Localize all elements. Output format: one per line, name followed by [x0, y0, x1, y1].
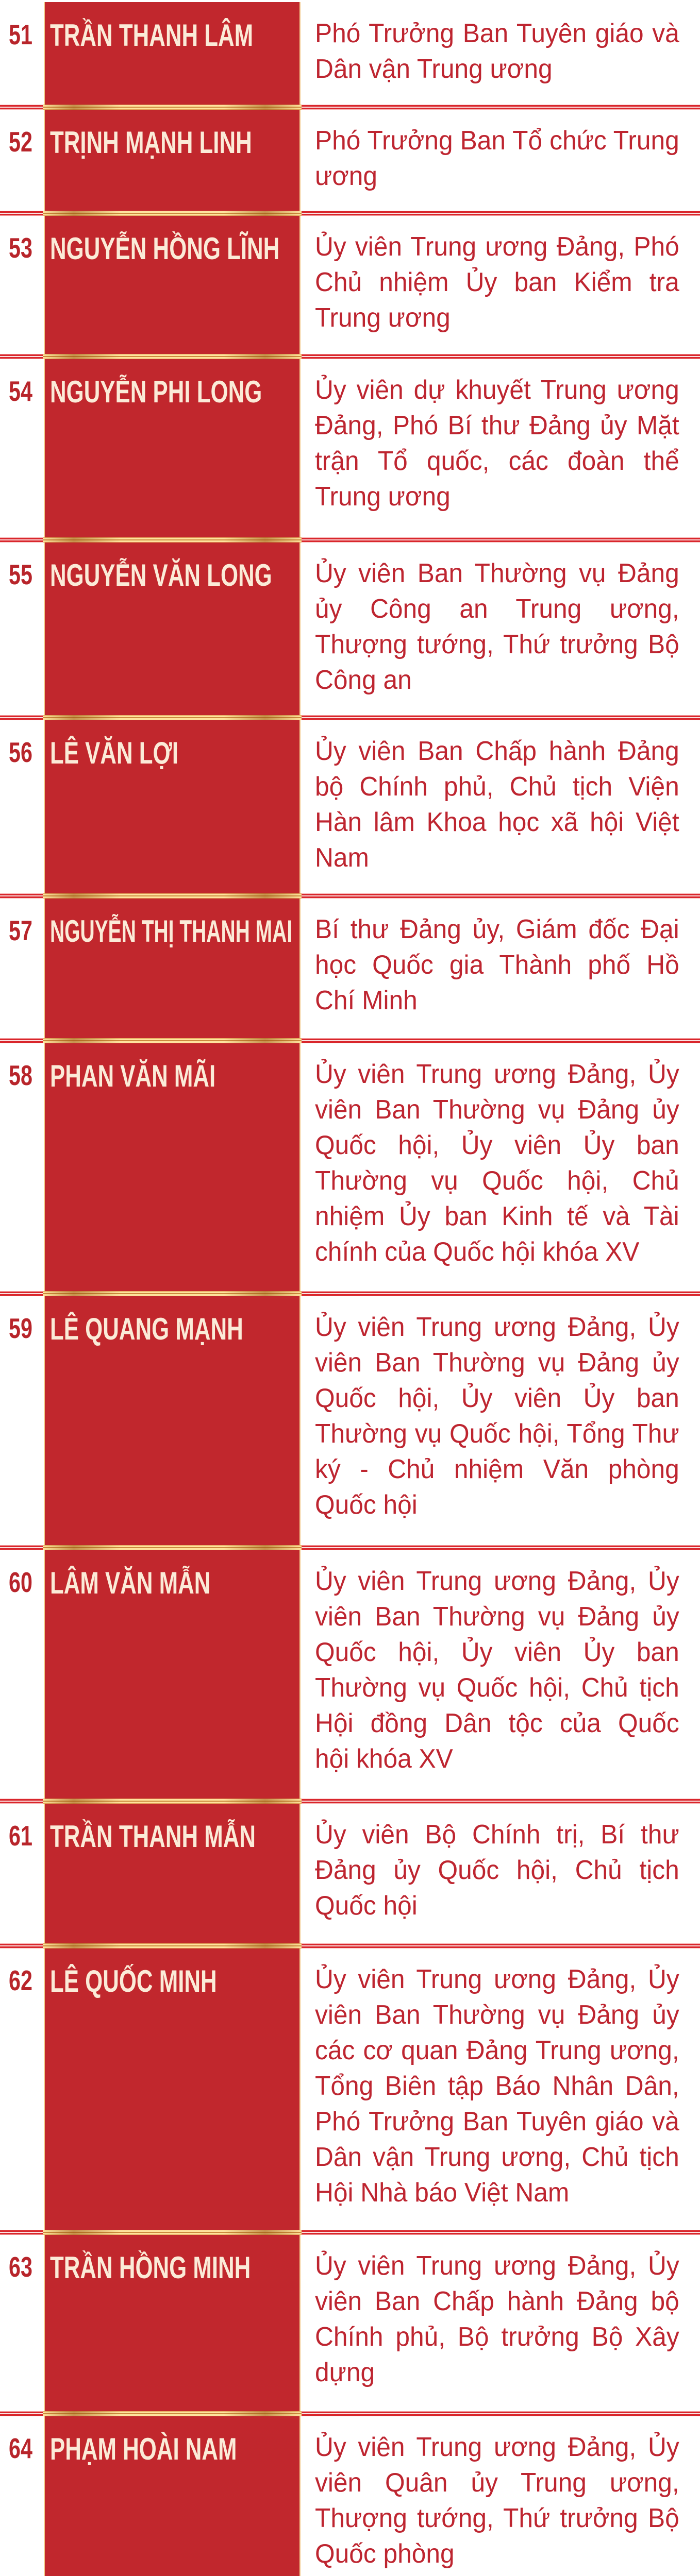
row 60: [9, 1566, 679, 1774]
name 62: LÊ QUỐC MINH: [50, 1964, 217, 1998]
number 61: 61: [9, 1820, 32, 1852]
description 55: [315, 558, 679, 695]
description 64: Thượng tướng, Thứ trưởng Bộ: [315, 2503, 679, 2533]
description 59: [315, 1312, 679, 1520]
description 58: [315, 1059, 679, 1267]
description 54: trận Tổ quốc, các đoàn thể: [315, 446, 679, 476]
description 52: [315, 126, 679, 191]
number 64: 64: [9, 2432, 32, 2464]
number 55: 55: [9, 558, 32, 590]
description 58: viên Ban Thường vụ Đảng ủy: [315, 1095, 679, 1125]
description 62: Dân vận Trung ương, Chủ tịch: [315, 2142, 679, 2172]
description 64: Quốc phòng: [315, 2539, 455, 2569]
description 59: Thường vụ Quốc hội, Tổng Thư: [315, 1419, 679, 1449]
description 63: viên Ban Chấp hành Đảng bộ: [315, 2286, 679, 2316]
number 56: 56: [9, 736, 32, 768]
description 57: học Quốc gia Thành phố Hồ: [315, 950, 679, 980]
description 60: Quốc hội, Ủy viên Ủy ban: [315, 1637, 679, 1667]
number 58: 58: [9, 1059, 32, 1091]
row 57: [9, 914, 679, 1015]
description 62: các cơ quan Đảng Trung ương,: [315, 2036, 679, 2065]
description 60: Ủy viên Trung ương Đảng, Ủy: [315, 1566, 679, 1596]
description 59: Quốc hội, Ủy viên Ủy ban: [315, 1383, 679, 1413]
description 61: Quốc hội: [315, 1891, 418, 1921]
red name column: [44, 2, 301, 2576]
description 59: Ủy viên Trung ương Đảng, Ủy: [315, 1312, 679, 1342]
description 56: [315, 736, 679, 873]
number 54: 54: [9, 375, 32, 407]
description 56: Ủy viên Ban Chấp hành Đảng: [315, 736, 679, 766]
description 53: Chủ nhiệm Ủy ban Kiểm tra: [315, 267, 679, 297]
description 60: viên Ban Thường vụ Đảng ủy: [315, 1602, 679, 1632]
description 60: Hội đồng Dân tộc của Quốc: [315, 1708, 679, 1738]
name 59: LÊ QUANG MẠNH: [50, 1312, 243, 1346]
description 57: Bí thư Đảng ủy, Giám đốc Đại: [315, 914, 679, 944]
number 62: 62: [9, 1964, 32, 1996]
description 56: Hàn lâm Khoa học xã hội Việt: [315, 807, 679, 837]
number 52: 52: [9, 126, 32, 158]
number 63: 63: [9, 2251, 32, 2283]
description 63: Chính phủ, Bộ trưởng Bộ Xây: [315, 2322, 679, 2352]
description 55: Thượng tướng, Thứ trưởng Bộ: [315, 630, 679, 659]
name 64: PHẠM HOÀI NAM: [50, 2432, 237, 2466]
description 51: Dân vận Trung ương: [315, 54, 553, 84]
description 64: viên Quân ủy Trung ương,: [315, 2468, 679, 2498]
row 56: [9, 736, 679, 873]
description 52: Phó Trưởng Ban Tổ chức Trung: [315, 126, 679, 156]
row 51: [9, 18, 679, 84]
description 56: Nam: [315, 843, 369, 873]
description 51: [315, 19, 679, 84]
description 58: chính của Quốc hội khóa XV: [315, 1237, 639, 1267]
description 62: viên Ban Thường vụ Đảng ủy: [315, 2000, 679, 2030]
description 58: Thường vụ Quốc hội, Chủ: [315, 1166, 679, 1196]
description 59: viên Ban Thường vụ Đảng ủy: [315, 1348, 679, 1378]
description 56: bộ Chính phủ, Chủ tịch Viện: [315, 772, 679, 802]
description 54: Đảng, Phó Bí thư Đảng ủy Mặt: [315, 411, 679, 440]
number 53: 53: [9, 232, 32, 264]
description 53: Ủy viên Trung ương Đảng, Phó: [315, 232, 679, 262]
description 54: Ủy viên dự khuyết Trung ương: [315, 375, 679, 405]
description 58: nhiệm Ủy ban Kinh tế và Tài: [315, 1201, 679, 1231]
description 53: [315, 231, 679, 333]
row 52: [9, 125, 679, 191]
description 55: Công an: [315, 665, 412, 695]
row 53: [9, 231, 679, 333]
row 55: [9, 558, 679, 695]
row 61: [9, 1819, 679, 1921]
name 51: TRẦN THANH LÂM: [50, 18, 253, 53]
description 64: [315, 2432, 679, 2569]
name 60: LÂM VĂN MẪN: [50, 1566, 210, 1600]
row 64: [9, 2432, 679, 2569]
description 57: Chí Minh: [315, 986, 418, 1015]
number 60: 60: [9, 1566, 32, 1598]
description 60: hội khóa XV: [315, 1744, 453, 1774]
description 53: Trung ương: [315, 303, 451, 333]
number 59: 59: [9, 1312, 32, 1344]
description 60: Thường vụ Quốc hội, Chủ tịch: [315, 1673, 679, 1703]
name 56: LÊ VĂN LỢI: [50, 736, 178, 770]
description 62: Phó Trưởng Ban Tuyên giáo và: [315, 2107, 679, 2137]
description 62: Ủy viên Trung ương Đảng, Ủy: [315, 1964, 679, 1994]
description 63: Ủy viên Trung ương Đảng, Ủy: [315, 2251, 679, 2281]
description 60: [315, 1566, 679, 1774]
description 55: ủy Công an Trung ương,: [315, 594, 679, 624]
name 61: TRẦN THANH MẪN: [50, 1819, 256, 1854]
row 63: [9, 2250, 679, 2387]
description 62: Hội Nhà báo Việt Nam: [315, 2178, 569, 2208]
description 59: Quốc hội: [315, 1490, 418, 1520]
name 54: NGUYỄN PHI LONG: [50, 375, 262, 409]
description 55: Ủy viên Ban Thường vụ Đảng: [315, 558, 679, 588]
name 55: NGUYỄN VĂN LONG: [50, 558, 272, 592]
row 54: [9, 375, 679, 512]
description 63: [315, 2250, 679, 2387]
description 54: Trung ương: [315, 482, 451, 512]
name 63: TRẦN HỒNG MINH: [50, 2250, 251, 2285]
name 57: NGUYỄN THỊ THANH MAI: [50, 914, 292, 948]
row 58: [9, 1059, 679, 1267]
number 57: 57: [9, 914, 32, 946]
description 62: Tổng Biên tập Báo Nhân Dân,: [315, 2071, 679, 2101]
description 51: Phó Trưởng Ban Tuyên giáo và: [315, 19, 679, 48]
description 61: [315, 1819, 679, 1921]
number 51: 51: [9, 19, 32, 50]
description 58: Quốc hội, Ủy viên Ủy ban: [315, 1130, 679, 1160]
description 59: ký - Chủ nhiệm Văn phòng: [315, 1454, 679, 1484]
name 53: NGUYỄN HỒNG LĨNH: [50, 231, 279, 266]
row 62: [9, 1964, 679, 2208]
name 52: TRỊNH MẠNH LINH: [50, 125, 252, 160]
description 64: Ủy viên Trung ương Đảng, Ủy: [315, 2432, 679, 2462]
description 52: ương: [315, 161, 377, 191]
description 61: Đảng ủy Quốc hội, Chủ tịch: [315, 1855, 679, 1885]
description 57: [315, 914, 679, 1015]
description 62: [315, 1964, 679, 2208]
description 61: Ủy viên Bộ Chính trị, Bí thư: [315, 1820, 679, 1850]
description 63: dựng: [315, 2358, 375, 2387]
description 58: Ủy viên Trung ương Đảng, Ủy: [315, 1059, 679, 1089]
name 58: PHAN VĂN MÃI: [50, 1059, 215, 1093]
description 54: [315, 375, 679, 512]
row 59: [9, 1312, 679, 1520]
